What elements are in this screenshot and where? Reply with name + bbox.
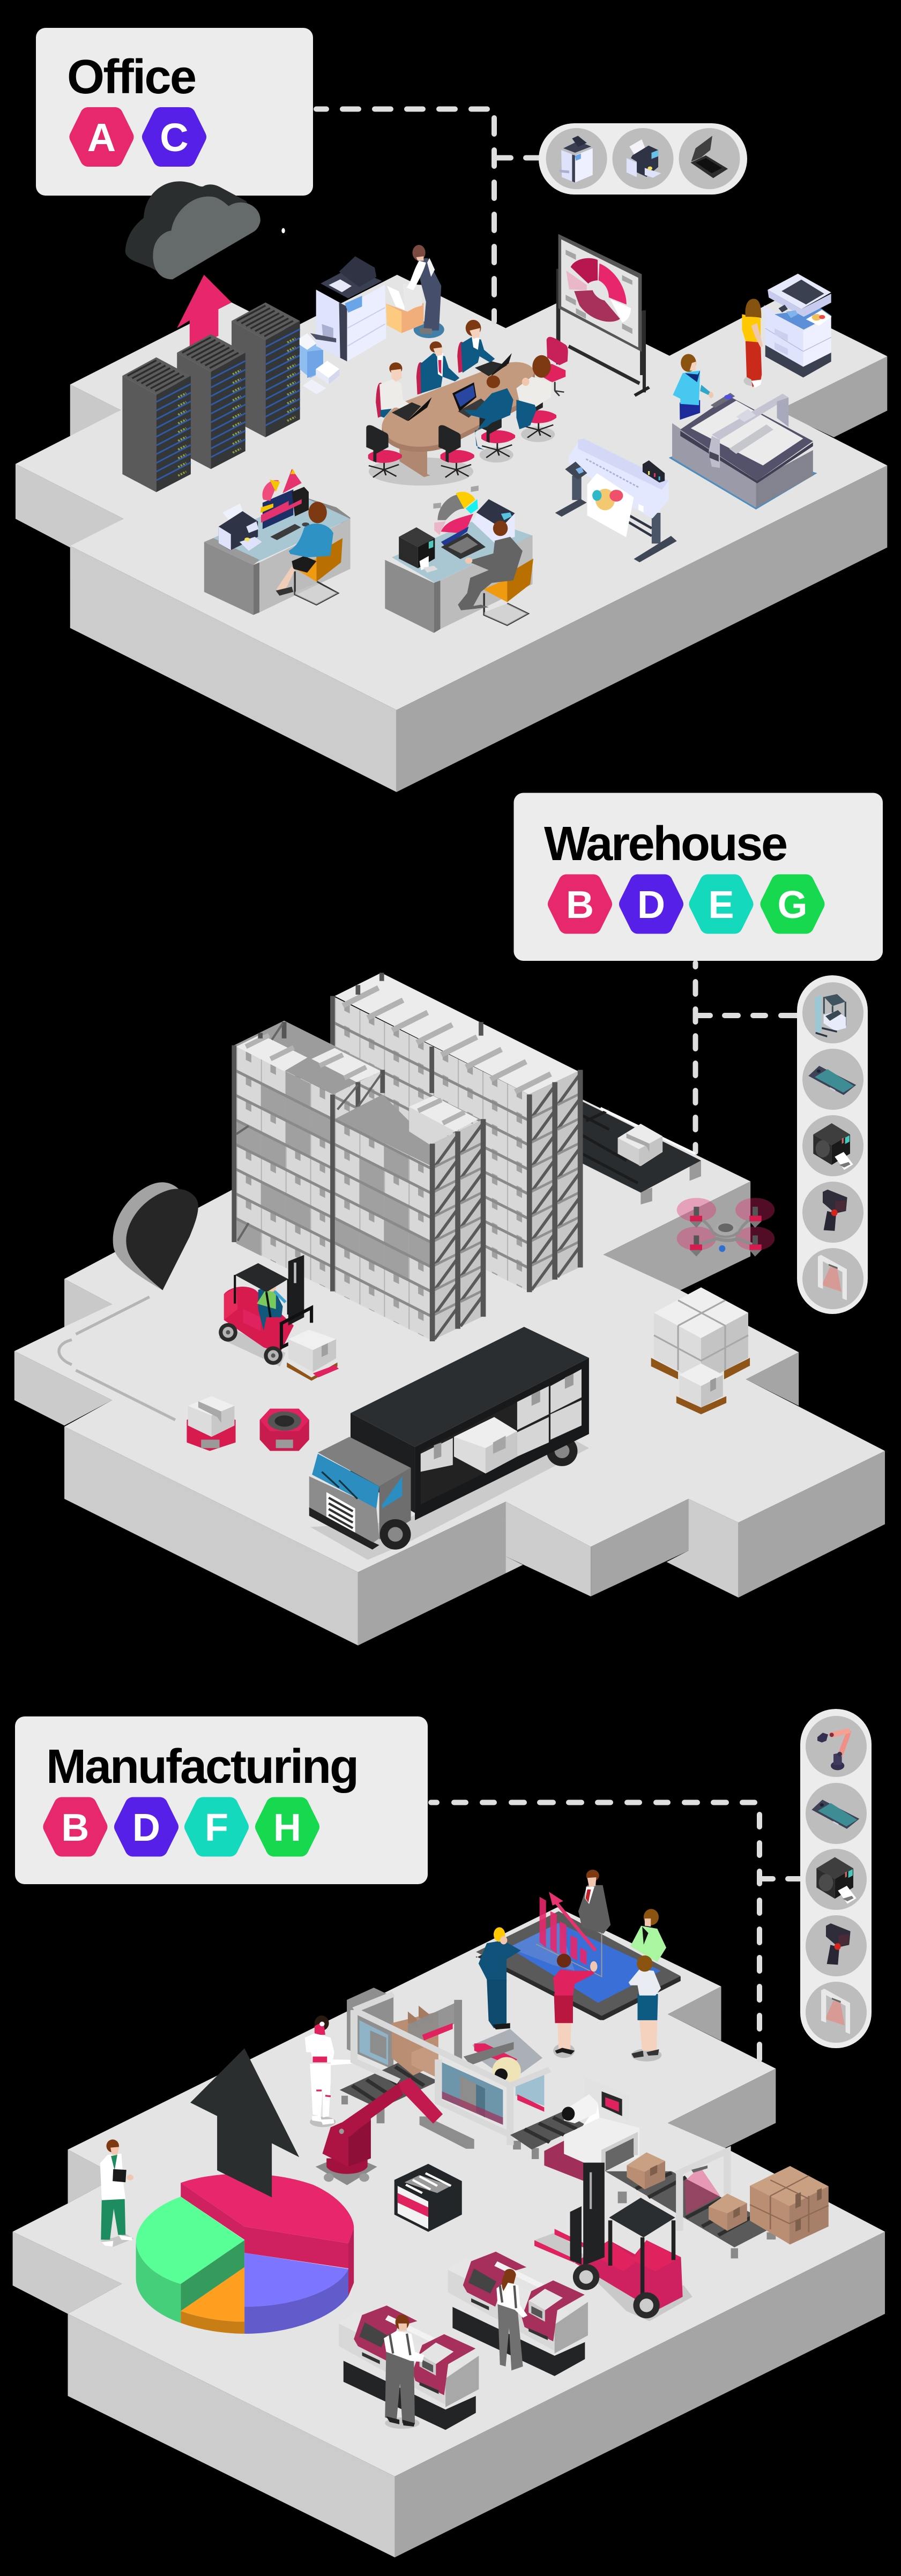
panel: office title card bbox=[36, 28, 313, 196]
person: manager in grey suit bbox=[578, 1870, 610, 1933]
person: woman in yellow bbox=[742, 299, 763, 388]
connector: warehouse dashed line bbox=[696, 963, 797, 1152]
icon: multifunction printer bbox=[559, 136, 593, 183]
panel: warehouse device pill bbox=[797, 975, 868, 1314]
icon: orange chair bbox=[483, 558, 533, 625]
icon: barcode scanner bbox=[823, 1190, 847, 1231]
table: desk with printer and monitor bbox=[204, 469, 350, 615]
badge: B bbox=[51, 1805, 99, 1849]
icon: flatbed scanner bbox=[690, 136, 728, 178]
icon: laptop bbox=[441, 527, 486, 559]
icon: location pin bbox=[113, 1182, 198, 1290]
heading: Manufacturing: Manufacturing bbox=[46, 1740, 359, 1794]
badge: B: B bbox=[566, 884, 594, 927]
person: woman in green bbox=[630, 1909, 666, 1962]
chart: whiteboard stand bbox=[569, 310, 650, 397]
badge: D: D bbox=[637, 884, 665, 927]
person: white shirt bbox=[376, 362, 415, 417]
icon: copier bbox=[764, 274, 832, 377]
platform: warehouse floor bbox=[14, 1096, 885, 1646]
icon: stacked paper boxes bbox=[300, 333, 339, 394]
badge: H bbox=[263, 1805, 311, 1849]
icon: robotic welding arm bbox=[316, 2078, 474, 2185]
icon: office multifunction printer bbox=[310, 256, 386, 361]
shelf: front right rack bbox=[332, 1094, 484, 1341]
badge: E: E bbox=[708, 884, 734, 927]
icon: drone bbox=[677, 1198, 775, 1257]
chart: tablet with bar chart and team bbox=[476, 1870, 681, 2062]
icon: conveyor with box bbox=[582, 1101, 701, 1205]
icon: desktop printer bbox=[627, 139, 661, 178]
icon: flatbed cutter bbox=[669, 393, 817, 510]
icon: label printer bbox=[813, 1123, 853, 1170]
icon: packing line conveyor and machine bbox=[340, 1988, 604, 2189]
badge: G: G bbox=[777, 884, 808, 927]
person: woman in red bbox=[553, 1954, 597, 2058]
badge: B: B bbox=[61, 1806, 89, 1849]
icon: wide format plotter bbox=[555, 438, 677, 562]
person: man with red tie bbox=[416, 341, 459, 394]
icon: laptops bbox=[392, 353, 512, 421]
icon: AGV robot carrying box bbox=[187, 1396, 236, 1451]
icon: stack of boxes bbox=[750, 2166, 829, 2244]
table: meeting group bbox=[366, 320, 568, 486]
icon: humanoid robot bbox=[305, 2015, 362, 2127]
icon: smartphone bbox=[811, 1800, 859, 1829]
badge: G bbox=[769, 882, 817, 927]
icon: AGV robot bbox=[260, 1409, 309, 1451]
icon: office printer bbox=[472, 499, 515, 543]
table: desk with laptop and label printer bbox=[385, 486, 533, 633]
person: seated man near bbox=[464, 376, 513, 450]
person: man in blue jacket bbox=[673, 354, 713, 420]
badge: A: A bbox=[87, 115, 116, 160]
icon: route line bbox=[59, 1297, 175, 1420]
chart: whiteboard with donut bbox=[559, 234, 642, 375]
chart: warehouse racking bbox=[234, 973, 581, 1341]
arrow: upload to cloud bbox=[177, 275, 232, 350]
icon: labeling machine bbox=[562, 2077, 639, 2171]
icon: orange chair bbox=[293, 538, 342, 604]
icon: label printer bbox=[816, 1857, 857, 1903]
badge: F: F bbox=[205, 1806, 228, 1849]
badge: A bbox=[77, 115, 125, 160]
badge: F bbox=[192, 1805, 241, 1849]
icon: scanning gate bbox=[821, 1989, 850, 2034]
person: man at desk bbox=[458, 521, 523, 610]
arrow: growth arrow bbox=[190, 2048, 299, 2197]
icon: monitor and charts bbox=[260, 469, 309, 529]
icon: robotic arm bbox=[817, 1728, 851, 1770]
icon: label printer bbox=[399, 527, 438, 573]
icon: cloud bbox=[125, 181, 285, 279]
panel: office device pill bbox=[539, 123, 747, 195]
icon: 3D printer bbox=[815, 994, 846, 1036]
person: seated man far bbox=[457, 320, 495, 373]
platform: office floor bbox=[16, 275, 887, 792]
section: warehouse bbox=[14, 793, 885, 1646]
badge: H: H bbox=[273, 1806, 301, 1849]
shelf: left front rack bbox=[234, 1021, 383, 1291]
platform: manufacturing floor bbox=[13, 1907, 885, 2557]
person: machine operator front bbox=[384, 2314, 424, 2429]
shelf: back rack bbox=[332, 973, 581, 1292]
section: manufacturing bbox=[13, 1709, 885, 2557]
connector: manufacturing dashed line bbox=[431, 1803, 800, 2059]
icon: red forklift bbox=[534, 2163, 692, 2321]
person: doctor with tablet bbox=[100, 2139, 133, 2247]
icon: pallet stacks bbox=[651, 1287, 750, 1414]
connector: office dashed line bbox=[316, 109, 539, 322]
icon: desk printer bbox=[219, 504, 262, 551]
icon: storage crate bbox=[394, 2164, 462, 2232]
section: office bbox=[16, 28, 887, 792]
panel: manufacturing device pill bbox=[800, 1709, 872, 2048]
person: woman in white bbox=[516, 355, 552, 429]
chart: floating donut bbox=[433, 486, 479, 535]
badge: C: C bbox=[160, 115, 189, 160]
badge: D: D bbox=[132, 1806, 160, 1849]
panel: warehouse title card bbox=[513, 793, 883, 961]
icon: smartphone bbox=[808, 1066, 856, 1095]
icon: delivery truck bbox=[309, 1327, 589, 1560]
icon: barcode scanner bbox=[826, 1923, 851, 1965]
heading: Warehouse: Warehouse bbox=[544, 817, 788, 871]
heading: Office: Office bbox=[67, 50, 197, 104]
badge: D bbox=[122, 1805, 170, 1849]
icon: magenta chair bbox=[533, 337, 568, 396]
badge: D bbox=[627, 882, 675, 927]
icon: output conveyor with boxes and scanner bbox=[605, 2151, 829, 2258]
icon: CNC lathe front bbox=[339, 2305, 479, 2430]
icon: man in overalls with box bbox=[386, 245, 444, 338]
person: woman at desk bbox=[276, 502, 333, 596]
icon: forklift with pallet bbox=[219, 1255, 339, 1381]
chart: 3D pie chart bbox=[136, 2048, 354, 2334]
person: man with helmet bbox=[479, 1927, 521, 2029]
panel: manufacturing title card bbox=[15, 1716, 428, 1884]
person: machine operator back bbox=[496, 2269, 527, 2370]
icon: front chairs bbox=[366, 385, 556, 477]
icon: scanning gate bbox=[818, 1255, 847, 1300]
badge: B bbox=[556, 882, 604, 927]
person: woman in white bbox=[629, 1955, 661, 2062]
badge: C bbox=[150, 115, 198, 160]
badge: E bbox=[697, 882, 745, 927]
icon: CNC lathe back bbox=[448, 2252, 588, 2376]
chart: server racks bbox=[122, 302, 300, 492]
